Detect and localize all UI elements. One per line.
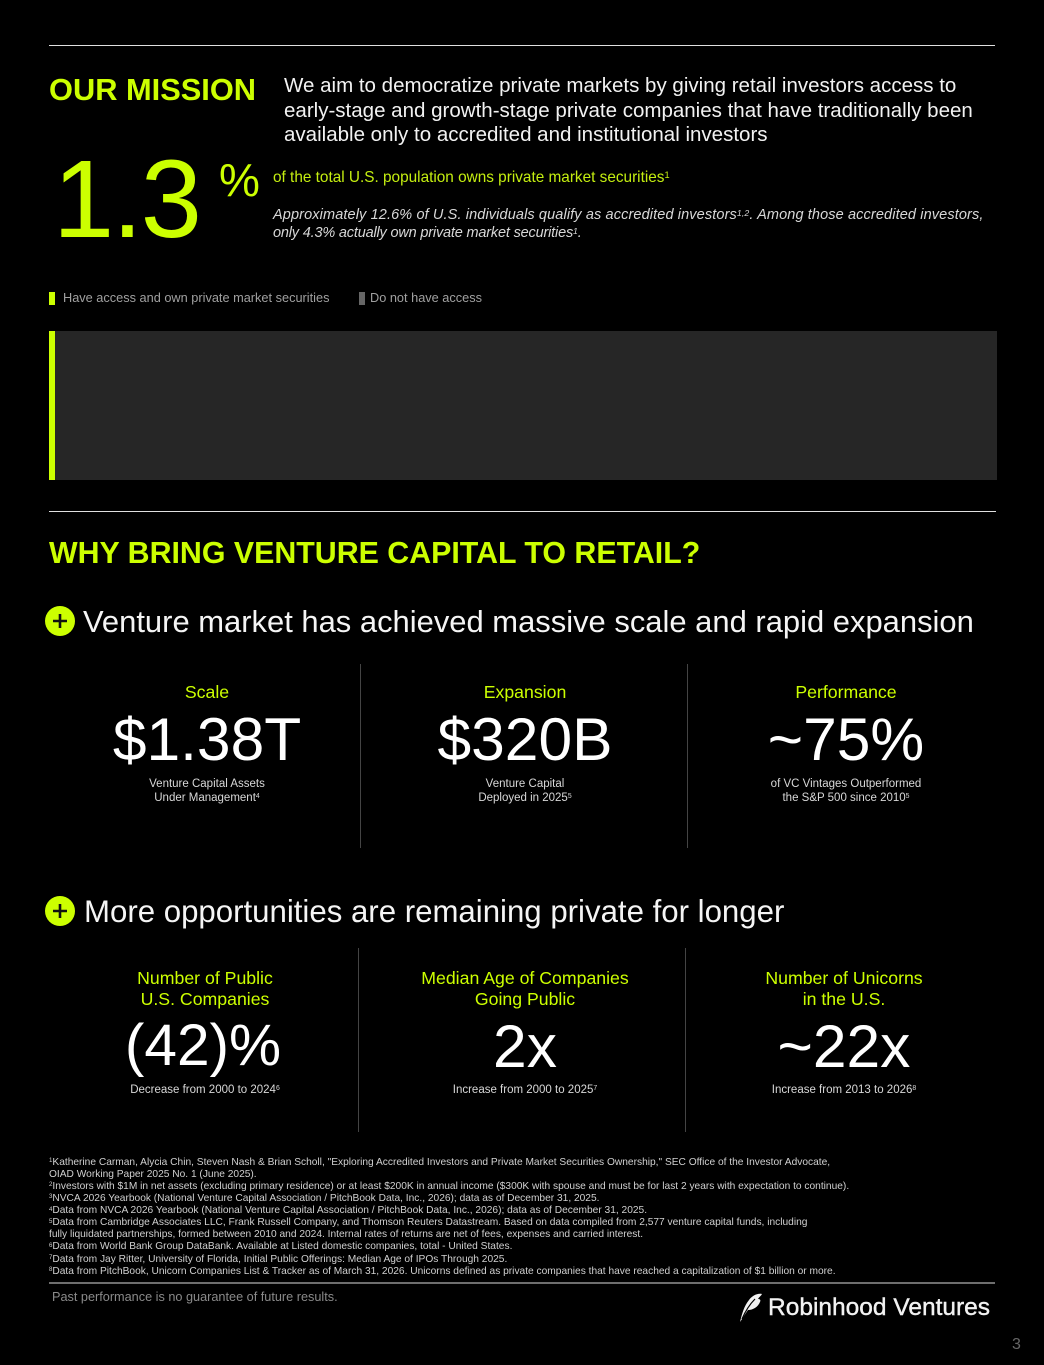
footnotes: 1Katherine Carman, Alycia Chin, Steven Nash & Brian Scholl, "Exploring Accredited Investors and Private Market Securities Ownership," SEC Office of the Investor Advocate, [49, 1156, 830, 1168]
stat: performance: ~75% [768, 705, 924, 773]
stat: median age: Median Age of Companies [421, 968, 629, 988]
mission statement: We aim to democratize private markets by giving retail investors access to [284, 74, 956, 97]
footnotes: 5Data from Cambridge Associates LLC, Frank Russell Company, and Thomson Reuters Datastream. Based on data compiled from 2,577 venture capital funds, including [49, 1217, 807, 1228]
footnotes: OIAD Working Paper 2025 No. 1 (June 2025). [49, 1169, 257, 1180]
subheading: more opportunities: More opportunities are remaining private for longer [84, 894, 784, 929]
stat: performance [768, 682, 924, 804]
stat: scale: Under Management4 [154, 792, 260, 804]
logo: Robinhood Ventures [740, 1294, 990, 1322]
footnotes: 2Investors with $1M in net assets (excluding primary residence) or at least $200K in annual income ($300K with spouse and must be for last 2 years with expectation to continue). [49, 1181, 849, 1192]
stat: scale [113, 682, 301, 804]
stat: expansion: $320B [438, 705, 612, 773]
stat: performance: Performance [795, 682, 897, 702]
footnotes: 7Data from Jay Ritter, University of Florida, Initial Public Offerings: Median Age of IPOs Through 2025. [49, 1254, 507, 1264]
icon: plus [45, 606, 75, 636]
subheading: venture market: Venture market has achieved massive scale and rapid expansion [83, 604, 974, 639]
bar segment: 1.3% access [49, 331, 55, 480]
footnotes [49, 1156, 849, 1277]
footnotes: 4Data from NVCA 2026 Yearbook (National Venture Capital Association / PitchBook Data, Inc., 2026); data as of December 31, 2025. [49, 1205, 647, 1216]
footnotes: 3NVCA 2026 Yearbook (National Venture Capital Association / PitchBook Data, Inc., 2026); data as of December 31, 2025. [49, 1193, 599, 1204]
logo wordmark: Robinhood Ventures [768, 1294, 990, 1321]
proportional bar chart [49, 331, 997, 480]
stat description: of the total U.S. population owns private market securities1 [273, 169, 670, 186]
stat: scale: $1.38T [113, 705, 301, 773]
stat: unicorns: ~22x [778, 1012, 910, 1080]
footnotes: 8Data from PitchBook, Unicorn Companies List & Tracker as of March 31, 2026. Unicorns defined as private companies that have reached a capitalization of $1 billion or more. [49, 1266, 836, 1277]
disclaimer: Past performance is no guarantee of future results. [52, 1290, 338, 1304]
stat: expansion: Venture Capital [486, 778, 564, 790]
stat: unicorns: Number of Unicorns [765, 968, 923, 988]
stat: performance: the S&P 500 since 20105 [782, 792, 910, 804]
icon: plus [45, 896, 75, 926]
mission statement: available only to accredited and institutional investors [284, 123, 768, 146]
stat: public companies: Number of Public [137, 968, 273, 988]
stat: public companies: (42)% [125, 1013, 281, 1078]
stat: public companies: Decrease from 2000 to 20246 [130, 1084, 280, 1096]
heading: our mission: OUR MISSION [49, 72, 256, 107]
legend: have access label: Have access and own private market securities [63, 290, 329, 305]
legend: no access swatch [359, 292, 365, 305]
footnotes: 6Data from World Bank Group DataBank. Available at Listed domestic companies, total - United States. [49, 1241, 512, 1252]
stat: unicorns: in the U.S. [803, 989, 885, 1009]
mission statement: early-stage and growth-stage private companies that have traditionally been [284, 98, 973, 122]
stat: expansion: Deployed in 20255 [478, 792, 572, 804]
legend: no access label: Do not have access [370, 290, 482, 305]
accredited investors note: only 4.3% actually own private market securities1. [273, 225, 582, 241]
stat: median age: 2x [493, 1012, 557, 1080]
stat: median age: Going Public [475, 989, 575, 1009]
stat: public companies: U.S. Companies [141, 989, 269, 1009]
stat: unicorns: Increase from 2013 to 20268 [772, 1084, 916, 1096]
footnotes: fully liquidated partnerships, formed between 2010 and 2024. Internal rates of returns are net of fees, expenses and carried interest. [49, 1229, 643, 1240]
stat: median age [421, 968, 629, 1096]
stat: public companies [125, 968, 281, 1096]
stat: median age: Increase from 2000 to 20257 [453, 1084, 597, 1096]
legend [49, 290, 482, 305]
accredited investors note: Approximately 12.6% of U.S. individuals qualify as accredited investors1,2. Among those accredited investors, [273, 207, 984, 223]
stat: scale: Scale [185, 682, 229, 702]
stat: scale: Venture Capital Assets [149, 778, 265, 790]
stat: performance: of VC Vintages Outperformed [771, 778, 921, 790]
heading: why bring venture capital to retail: WHY BRING VENTURE CAPITAL TO RETAIL? [49, 537, 700, 570]
stat: unicorns [765, 968, 923, 1096]
accredited investors note [272, 207, 984, 241]
page number: 3 [1012, 1336, 1021, 1353]
icon: feather [740, 1294, 762, 1322]
stat: expansion [438, 682, 612, 804]
big stat: 1.3%: 1.3 [53, 138, 200, 261]
legend: have access swatch [49, 292, 55, 305]
mission statement [284, 74, 973, 146]
stat: expansion: Expansion [484, 682, 566, 702]
big stat: 1.3%: % [219, 154, 260, 206]
